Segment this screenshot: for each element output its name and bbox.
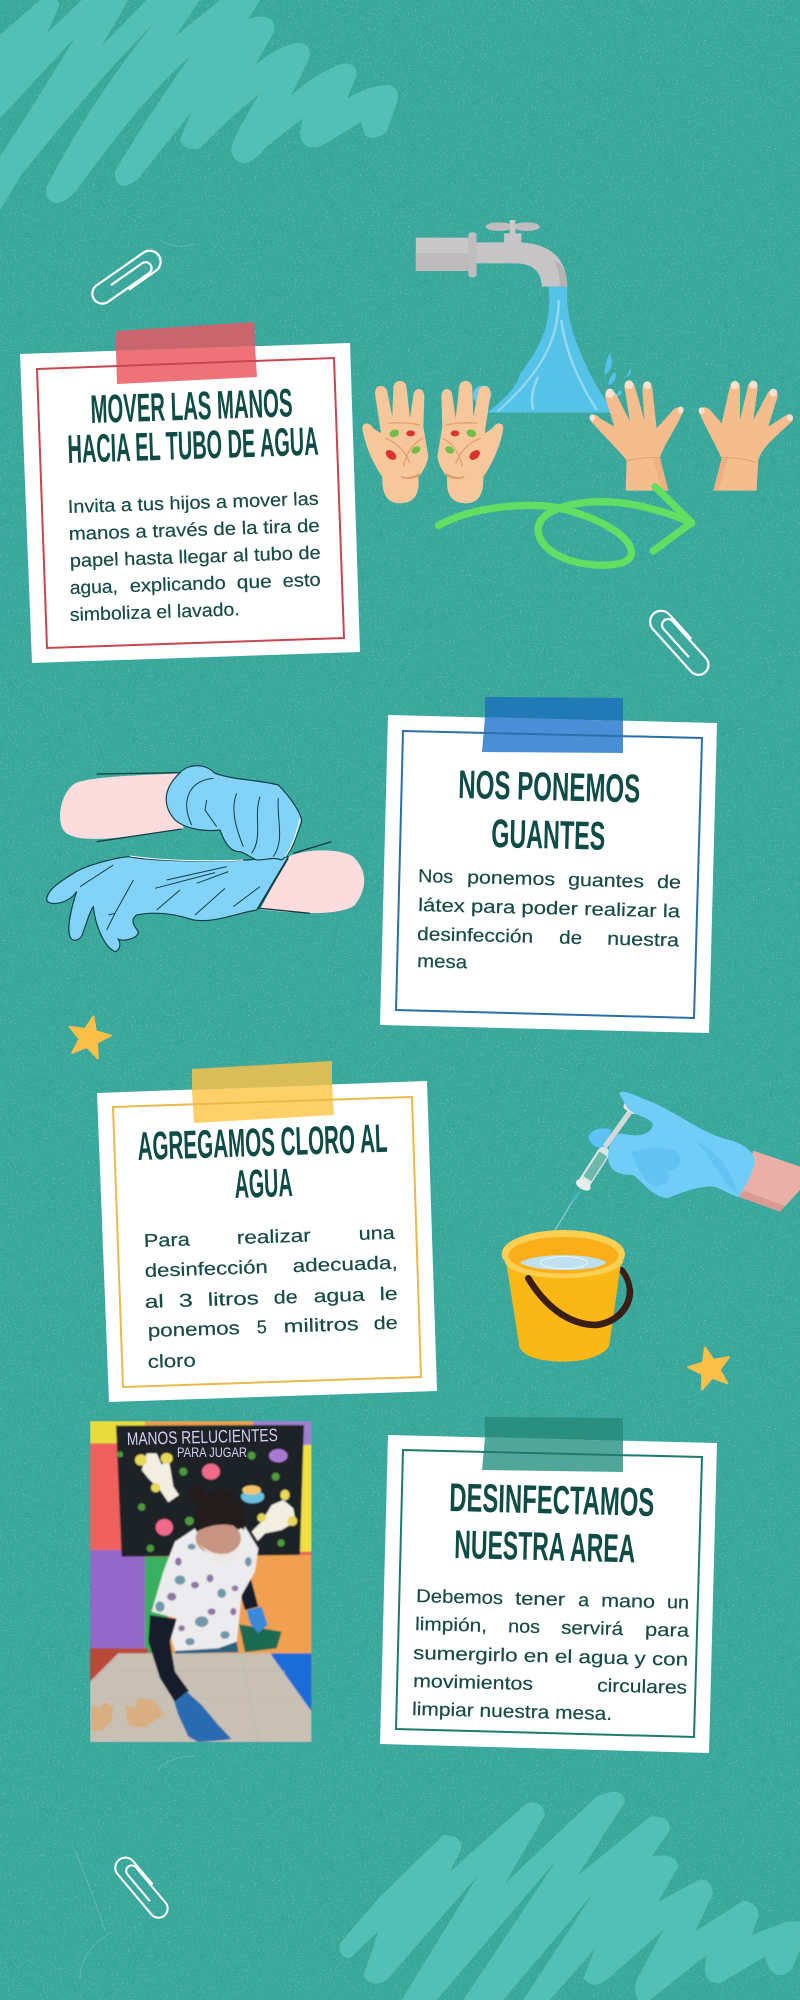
text: step 1 body: explicando (129, 572, 226, 596)
text: step 3 body: de (273, 1286, 298, 1308)
text: step 4 body: movimientos (413, 1670, 533, 1694)
illustration: gloved hands (47, 766, 364, 952)
panel: step 4 card (380, 1417, 717, 1753)
heading: step 2: NOS PONEMOS (458, 763, 641, 811)
icon: yellow bucket (502, 1230, 630, 1362)
text: step 2 body (417, 865, 681, 972)
text: step 4 body: un (667, 1591, 689, 1613)
illustration: syringe in gloved hand (555, 1092, 800, 1230)
text: step 2 body: Nos (418, 865, 453, 887)
heading: step 3: AGREGAMOS CLORO AL (137, 1117, 388, 1169)
text: step 1 body (67, 488, 321, 625)
text: step 3 body: adecuada, (292, 1252, 398, 1276)
text: step 4 body: a (578, 1589, 590, 1610)
arrow: green loop (438, 487, 692, 565)
tape: yellow (192, 1061, 334, 1123)
text: step 3 body: militros (283, 1313, 359, 1336)
text: step 1 body: simboliza el lavado. (69, 598, 240, 625)
panel: step 1 card: HACIA EL TUBO DE AGUA (67, 420, 319, 472)
text: step 4 body: limpiar nuestra mesa. (412, 1698, 612, 1724)
text: step 3 body (143, 1222, 398, 1372)
text: step 2 body: guantes (568, 869, 644, 892)
scribble: bottom right (339, 1792, 800, 2000)
text: step 4 body: mano (601, 1590, 655, 1612)
text: step 3 body: litros (207, 1287, 259, 1310)
text: step 3 body: ponemos (147, 1317, 240, 1341)
text: step 3 body: al (144, 1290, 164, 1312)
text: step 4 body: sumergirlo en el agua y con (413, 1642, 688, 1670)
photo: teacher disinfecting the table: PARA JUGAR (177, 1444, 247, 1460)
text: step 3 body: 5 (256, 1316, 267, 1337)
text: step 4 body: servirá (561, 1617, 624, 1639)
text: step 4 body (412, 1585, 690, 1724)
heading: step 1 (67, 381, 319, 472)
text: step 3 body: 3 (178, 1289, 193, 1311)
text: step 3 body: cloro (147, 1349, 196, 1372)
heading: step 2: GUANTES (491, 812, 606, 859)
text: step 3 body: le (379, 1283, 398, 1304)
text: step 2 body: látex para poder realizar la (418, 894, 681, 921)
text: step 1 body: Invita a tus hijos a mover las (67, 488, 319, 517)
heading: step 4 (449, 1476, 655, 1571)
tape: red (116, 322, 257, 384)
heading: step 3 (137, 1117, 388, 1207)
text: step 4 body: Debemos (416, 1585, 503, 1608)
icon: star left (65, 1012, 114, 1060)
tape: teal (482, 1417, 623, 1472)
doodle marks (75, 240, 195, 1980)
text: step 4 body: nos (508, 1615, 540, 1637)
text: step 2 body: ponemos (467, 866, 555, 889)
tape: blue (482, 697, 623, 753)
text: step 2 body: de (559, 926, 582, 948)
icon: paperclip bottom (111, 1853, 173, 1921)
text: step 3 body: Para (143, 1228, 191, 1251)
text: step 2 body: mesa (417, 950, 468, 972)
text: step 4 body: tener (515, 1587, 565, 1610)
text: step 3 body: de (373, 1312, 398, 1334)
icon: faucet with water (416, 220, 631, 413)
heading: step 4: NUESTRA AREA (454, 1523, 636, 1571)
text: step 3 body: desinfección (144, 1256, 268, 1281)
text: step 4 body: limpión, (415, 1613, 487, 1636)
icon: paperclip top (88, 246, 165, 309)
text: step 3 body: una (358, 1222, 396, 1244)
text: step 4 body: para (645, 1619, 690, 1641)
icon: star right (685, 1343, 735, 1392)
text: step 2 body: de (657, 871, 681, 892)
text: step 1 body: papel hasta llegar al tubo de (69, 542, 321, 571)
text: step 1 body: esto (282, 569, 321, 591)
scribble: top left (0, 0, 398, 210)
panel: step 2 card (380, 697, 717, 1033)
text: step 1 body: agua, (69, 575, 118, 598)
text: step 1 body: que (236, 570, 272, 592)
heading: step 2 (458, 763, 641, 859)
icon: paperclip right (646, 606, 714, 679)
heading: step 4: DESINFECTAMOS (449, 1476, 655, 1525)
text: step 2 body: desinfección (417, 923, 533, 947)
panel: step 3 card (97, 1061, 437, 1402)
photo: teacher disinfecting the table: MANOS RELUCIENTES (127, 1425, 278, 1449)
heading: step 3: AGUA (234, 1161, 293, 1207)
text: step 3 body: realizar (236, 1224, 311, 1248)
panel: step 1 card (20, 322, 360, 663)
heading: step 1: MOVER LAS MANOS (90, 381, 293, 432)
text: step 4 body: circulares (597, 1675, 687, 1698)
icon: clean hands (590, 380, 793, 491)
icon: dirty hands (362, 381, 503, 503)
photo: teacher disinfecting the table (90, 1421, 312, 1742)
text: step 3 body: agua (313, 1284, 366, 1306)
text: step 1 body: manos a través de la tira de (68, 515, 320, 544)
text: step 2 body: nuestra (607, 928, 680, 950)
